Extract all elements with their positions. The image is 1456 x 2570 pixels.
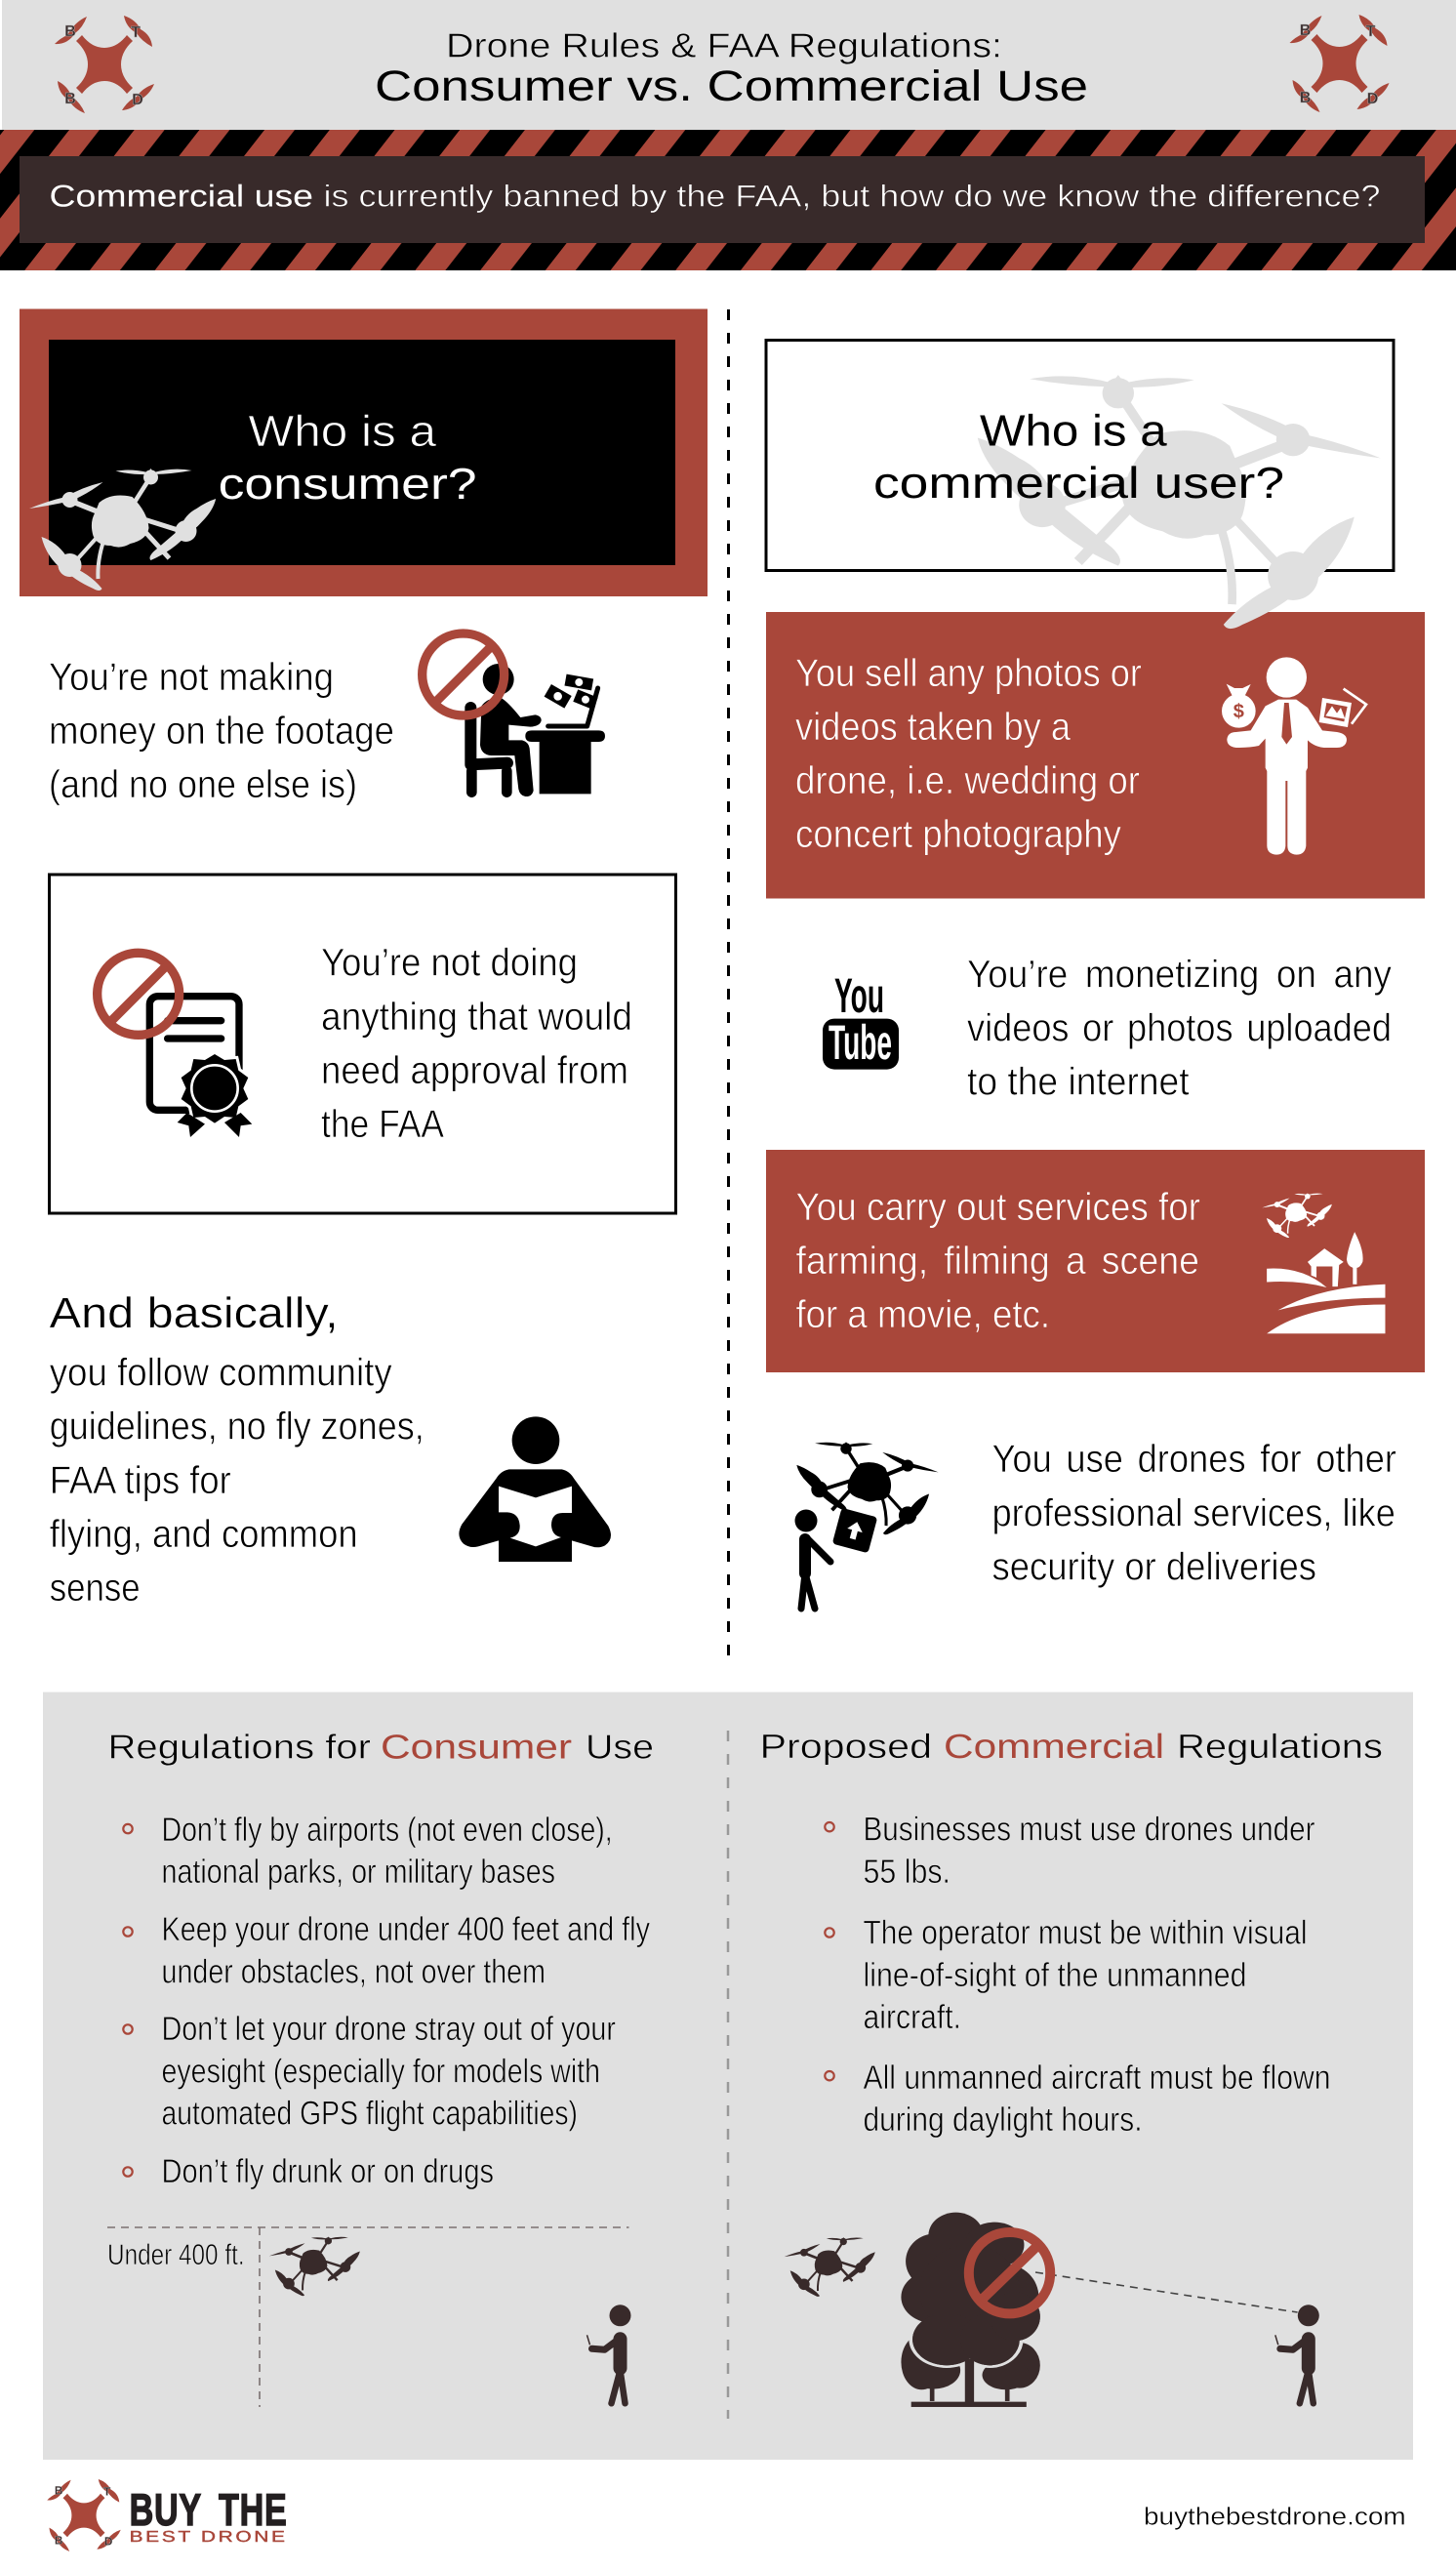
chart: under 400 ft diagram: Under 400 ft. (107, 2239, 245, 2271)
icon: businessman with money and photos (1222, 657, 1366, 855)
list: consumer rules: eyesight (especially for models with (162, 2054, 600, 2091)
icon: right header logo: B (1300, 90, 1311, 106)
list: commercial rules: during daylight hours. (863, 2101, 1142, 2139)
panel: farming services: You carry out services for (796, 1186, 1200, 1229)
text: and basically: guidelines, no fly zones, (50, 1406, 425, 1448)
banner (20, 156, 1425, 243)
panel: no FAA approval (49, 875, 675, 1213)
text: not making money (49, 656, 394, 806)
list: commercial rules: line-of-sight of the unmanned (863, 1957, 1247, 1994)
footer url: buythebestdrone.com (1144, 2504, 1406, 2531)
heading: who is a commercial user: Who is a (980, 406, 1168, 456)
footer logo: BUY THE (130, 2484, 288, 2535)
panel: who is a consumer: Who is a (248, 406, 437, 456)
icon: left header logo: D (132, 92, 143, 108)
text: other professional services (991, 1438, 1396, 1589)
center dashed divider (727, 309, 730, 1657)
list: consumer rules: national parks, or military bases (162, 1854, 555, 1891)
icon: right header logo: D (1367, 91, 1378, 107)
list: consumer rules: Don’t fly by airports (not even close), (162, 1812, 613, 1849)
text: not making money: money on the footage (49, 710, 394, 753)
text: monetizing (967, 953, 1392, 1104)
text: other professional services: security or deliveries (991, 1546, 1316, 1589)
panel: sell photos: drone, i.e. wedding or (795, 759, 1140, 802)
panel: regulations (43, 1693, 1413, 2460)
heading: regulations for consumer use (107, 1728, 654, 1766)
icon: left header logo (55, 16, 154, 113)
icon: drone delivering package to person (794, 1442, 939, 1609)
icon: youtube: You (834, 968, 884, 1023)
panel: sell photos: concert photography (795, 813, 1121, 856)
list: commercial rules: 55 lbs. (863, 1854, 950, 1891)
heading: who is a commercial user (873, 406, 1284, 508)
footer logo: B (55, 2535, 62, 2548)
hazard stripe band (0, 130, 1456, 270)
chart: line of sight diagram (785, 2213, 1319, 2407)
heading: proposed commercial regulations: Regulations (1177, 1728, 1383, 1766)
icon: person reading (459, 1416, 611, 1562)
icon: person at desk with money, prohibited (423, 633, 605, 796)
icon: right header logo: T (1366, 23, 1376, 40)
text: and basically: you follow community (50, 1351, 392, 1394)
panel: sell photos: You sell any photos or (795, 652, 1142, 695)
text: and basically: FAA tips for (50, 1459, 231, 1502)
list: consumer rules: Don’t fly drunk or on drugs (162, 2153, 494, 2190)
panel: farming services: farming, filming a scene (796, 1240, 1199, 1283)
text: other professional services: professional services, like (991, 1491, 1395, 1534)
text: and basically (50, 1289, 425, 1610)
text: other professional services: You use drones for other (991, 1438, 1396, 1481)
icon: youtube (823, 968, 899, 1070)
text: and basically: flying, and common (50, 1513, 358, 1556)
panel: no FAA approval: You’re not doing (321, 941, 578, 984)
list: consumer rules: Keep your drone under 400 feet and fly (162, 1911, 651, 1948)
list: commercial rules: aircraft. (863, 1999, 961, 2036)
banner: Commercial use (49, 178, 313, 213)
title: Drone Rules & FAA Regulations: (446, 27, 1002, 64)
icon: large gray drone (978, 375, 1381, 629)
text: and basically: And basically, (50, 1289, 339, 1337)
header background (2, 0, 1456, 130)
icon: certificate prohibited (98, 953, 252, 1137)
panel: who is a commercial user (766, 340, 1394, 570)
title: Consumer vs. Commercial Use (375, 62, 1088, 110)
list: commercial rules: The operator must be within visual (863, 1915, 1308, 1952)
icon: right header logo: B (1300, 22, 1311, 39)
panel: sell photos: videos taken by a (795, 706, 1072, 749)
heading: regulations for consumer use: Use (586, 1728, 654, 1766)
text: monetizing: You’re monetizing on any (967, 953, 1392, 996)
panel: farming services (766, 1150, 1425, 1372)
heading: who is a commercial user: commercial user? (873, 458, 1284, 508)
text: not making money: You’re not making (49, 656, 334, 699)
text: and basically: sense (50, 1567, 141, 1610)
footer logo (47, 2479, 288, 2551)
icon: businessman with money and photos: $ (1234, 700, 1244, 721)
panel: no FAA approval: the FAA (321, 1103, 444, 1146)
heading: proposed commercial regulations: Proposed (759, 1728, 932, 1766)
list: consumer rules: automated GPS flight capabilities) (162, 2095, 578, 2132)
chart: under 400 ft diagram (107, 2227, 630, 2407)
heading: proposed commercial regulations (759, 1728, 1383, 1766)
panel: farming services: for a movie, etc. (796, 1293, 1050, 1336)
footer logo: B (55, 2485, 62, 2497)
panel: who is a consumer (20, 308, 708, 596)
footer logo: D (104, 2536, 112, 2548)
list: consumer rules (123, 1812, 651, 2190)
list: consumer rules: under obstacles, not over them (162, 1953, 546, 1990)
text: not making money: (and no one else is) (49, 763, 357, 806)
footer logo: T (103, 2486, 110, 2498)
text: monetizing: to the internet (967, 1061, 1190, 1104)
icon: left header logo: B (64, 91, 76, 107)
panel: who is a consumer: consumer? (219, 459, 477, 509)
list: commercial rules (825, 1812, 1331, 2139)
panel: no FAA approval: need approval from (321, 1049, 628, 1092)
icon: farm landscape (1267, 1232, 1385, 1333)
title (375, 27, 1088, 110)
icon: left header logo: B (64, 23, 76, 40)
heading: regulations for consumer use: Regulations for (107, 1728, 371, 1766)
list: commercial rules: All unmanned aircraft must be flown (863, 2060, 1331, 2097)
panel: sell photos (766, 612, 1425, 898)
banner: is currently banned by the FAA, but how do we know the difference? (324, 178, 1380, 213)
icon: left header logo: T (131, 24, 141, 41)
footer logo: BEST DRONE (130, 2529, 288, 2546)
list: consumer rules: Don’t let your drone stray out of your (162, 2011, 616, 2048)
icon: right header logo (1290, 15, 1390, 112)
icon: small white drone (1262, 1193, 1332, 1238)
list: commercial rules: Businesses must use drones under (863, 1812, 1315, 1849)
heading: proposed commercial regulations: Commercial (944, 1728, 1164, 1766)
panel: no FAA approval: anything that would (321, 996, 632, 1039)
icon: youtube: Tube (829, 1015, 892, 1070)
text: monetizing: videos or photos uploaded (967, 1007, 1392, 1050)
heading: regulations for consumer use: Consumer (381, 1728, 572, 1766)
